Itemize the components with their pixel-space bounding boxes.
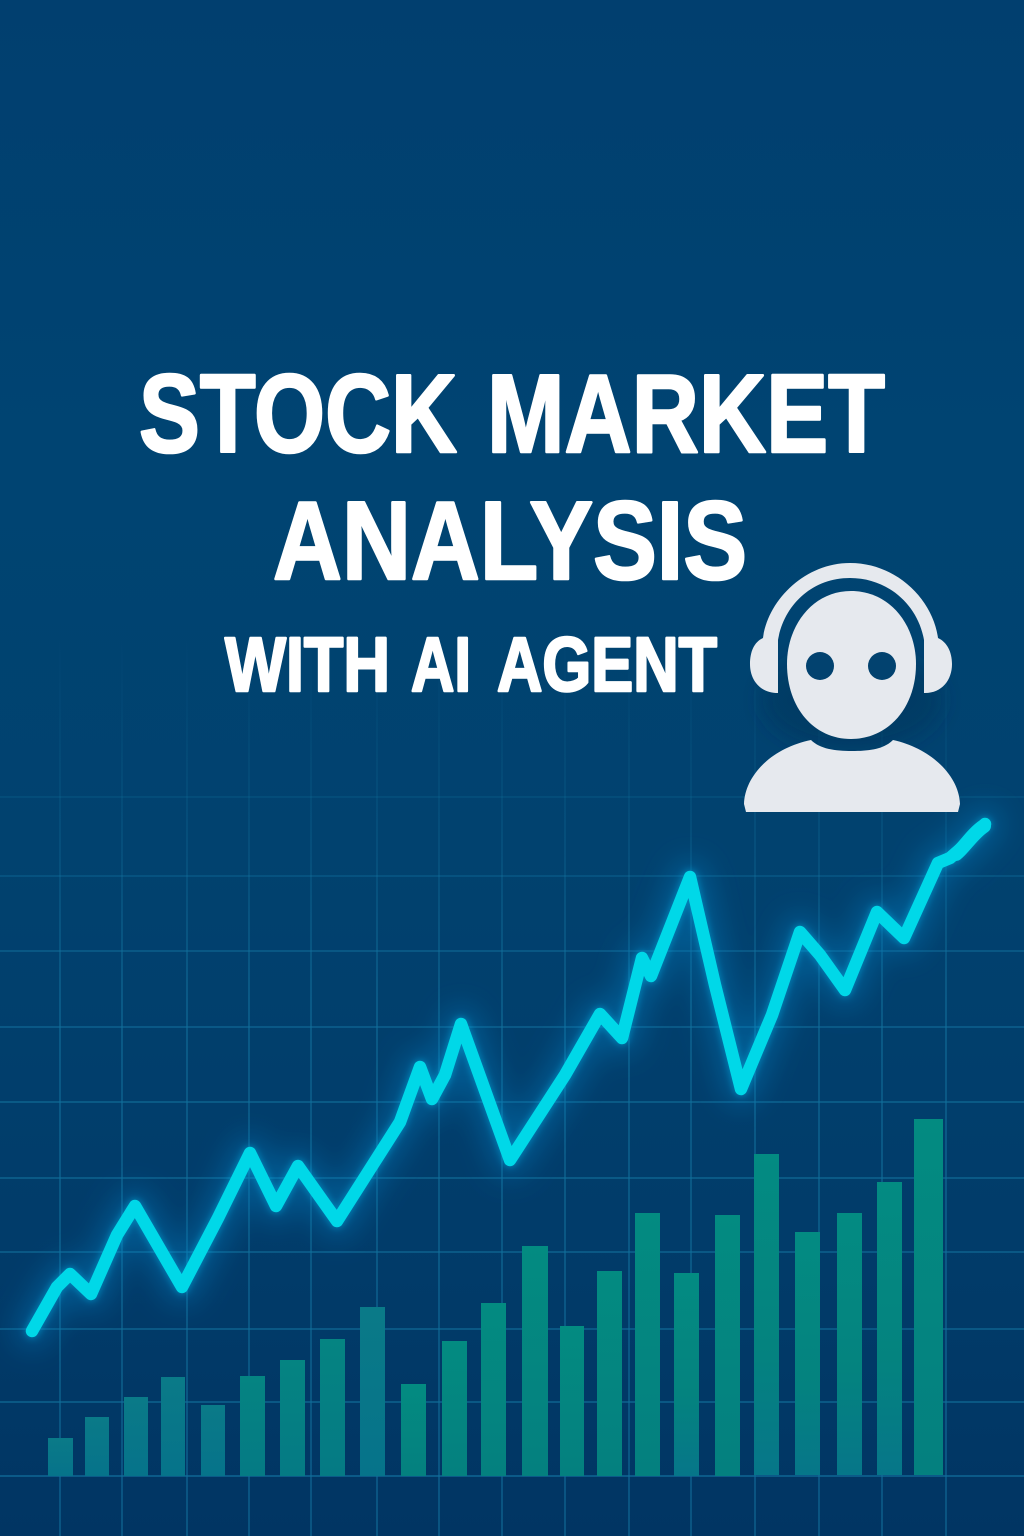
subtitle: AGENT: [497, 622, 717, 708]
title: ANALYSIS: [273, 479, 747, 603]
line chart with glow: [32, 824, 985, 1331]
subtitle: AI: [411, 622, 471, 708]
title: STOCK: [139, 352, 457, 476]
title: [139, 352, 885, 603]
bar chart: [48, 1119, 943, 1476]
icon: AI agent with headset: [744, 563, 960, 812]
subtitle: [225, 622, 717, 708]
title: MARKET: [487, 352, 885, 476]
chart grid: [0, 640, 1024, 1536]
subtitle: WITH: [225, 622, 390, 708]
